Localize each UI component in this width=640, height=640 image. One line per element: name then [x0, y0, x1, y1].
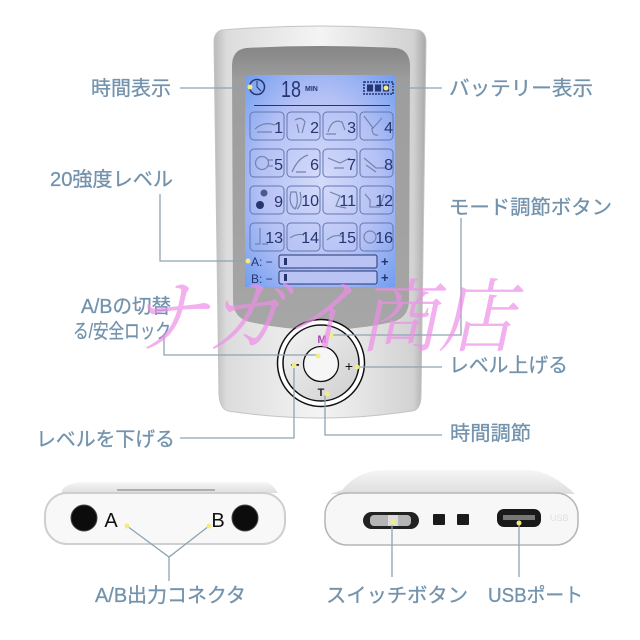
mode row 1: 3 [347, 120, 356, 137]
mode row 3: 11 [339, 193, 356, 210]
label: switch button: スイッチボタン [326, 584, 468, 607]
label: mode adjust button: モード調節ボタン [449, 196, 612, 219]
label: 20 intensity levels: 20強度レベル [50, 168, 173, 191]
mode row 3 [250, 186, 393, 214]
channel B row: B: − [251, 272, 273, 286]
jack B [232, 505, 258, 531]
timer unit: MIN [305, 86, 318, 93]
right bottom device: switch and USB [325, 470, 578, 545]
icon: battery [364, 82, 393, 94]
channel A row: + [381, 254, 389, 269]
timer readout: 18 [281, 76, 301, 102]
mode row 1 [250, 112, 393, 140]
label: A/B switch and safety lock: る/安全ロック [73, 320, 171, 343]
top edge [62, 482, 278, 493]
mode row 1: 4 [384, 120, 393, 137]
dial T: T [318, 387, 325, 399]
channel A row [251, 254, 389, 269]
mode row 2: 6 [310, 157, 319, 174]
channel A row: A: − [251, 255, 273, 269]
connector face [45, 493, 285, 544]
mode row 4 [250, 223, 393, 251]
label: time display: 時間表示 [91, 77, 171, 100]
mode row 2: 7 [347, 157, 356, 174]
mode row 4: 13 [265, 230, 283, 247]
USB port [497, 509, 541, 527]
indicator square 1 [433, 514, 445, 525]
grey screen panel [232, 46, 410, 330]
dial plus: + [345, 358, 353, 374]
mode row 2: 5 [274, 157, 283, 174]
label B: B [211, 510, 225, 532]
front face [325, 493, 578, 545]
dial minus [291, 364, 299, 366]
leader lines [127, 88, 519, 581]
mode row 3: 10 [301, 193, 319, 210]
marker dots [124, 84, 522, 528]
mode row 4: 14 [301, 230, 319, 247]
mode tile grid [250, 112, 393, 251]
LCD screen [245, 75, 395, 287]
device body [214, 26, 426, 418]
mode row 1: 1 [274, 120, 283, 137]
icon: clock [250, 80, 264, 94]
mode row 4: 15 [338, 230, 356, 247]
left bottom device: connectors [45, 482, 285, 544]
top surface [330, 470, 575, 494]
label: level up: レベル上げる [449, 354, 568, 377]
mode row 4: 16 [375, 230, 393, 247]
control dial [278, 320, 364, 406]
mode row 1: 2 [310, 120, 319, 137]
label A: A [104, 510, 118, 532]
label: USB port: USBポート [488, 584, 583, 607]
USB mark: USB [550, 513, 569, 523]
label: time adjust: 時間調節 [450, 422, 531, 445]
label: level down: レベルを下げる [36, 428, 175, 451]
mode row 3: 9 [274, 194, 283, 211]
label: A/B switch and safety lock: A/Bの切替 [81, 295, 171, 318]
channel B row [251, 270, 389, 286]
dial M: M [317, 334, 327, 346]
mode row 3: 12 [375, 193, 393, 210]
mode row 2: 8 [384, 157, 393, 174]
channel B row: + [381, 270, 389, 285]
main device [214, 26, 426, 418]
label: A/B output connector: A/B出力コネクタ [95, 584, 246, 607]
watermark: ナガイ商店 [127, 275, 531, 363]
jack A [71, 505, 97, 531]
label: battery display: バッテリー表示 [449, 77, 593, 100]
indicator square 2 [457, 514, 469, 525]
mode row 2 [250, 149, 393, 177]
switch button [363, 512, 419, 529]
